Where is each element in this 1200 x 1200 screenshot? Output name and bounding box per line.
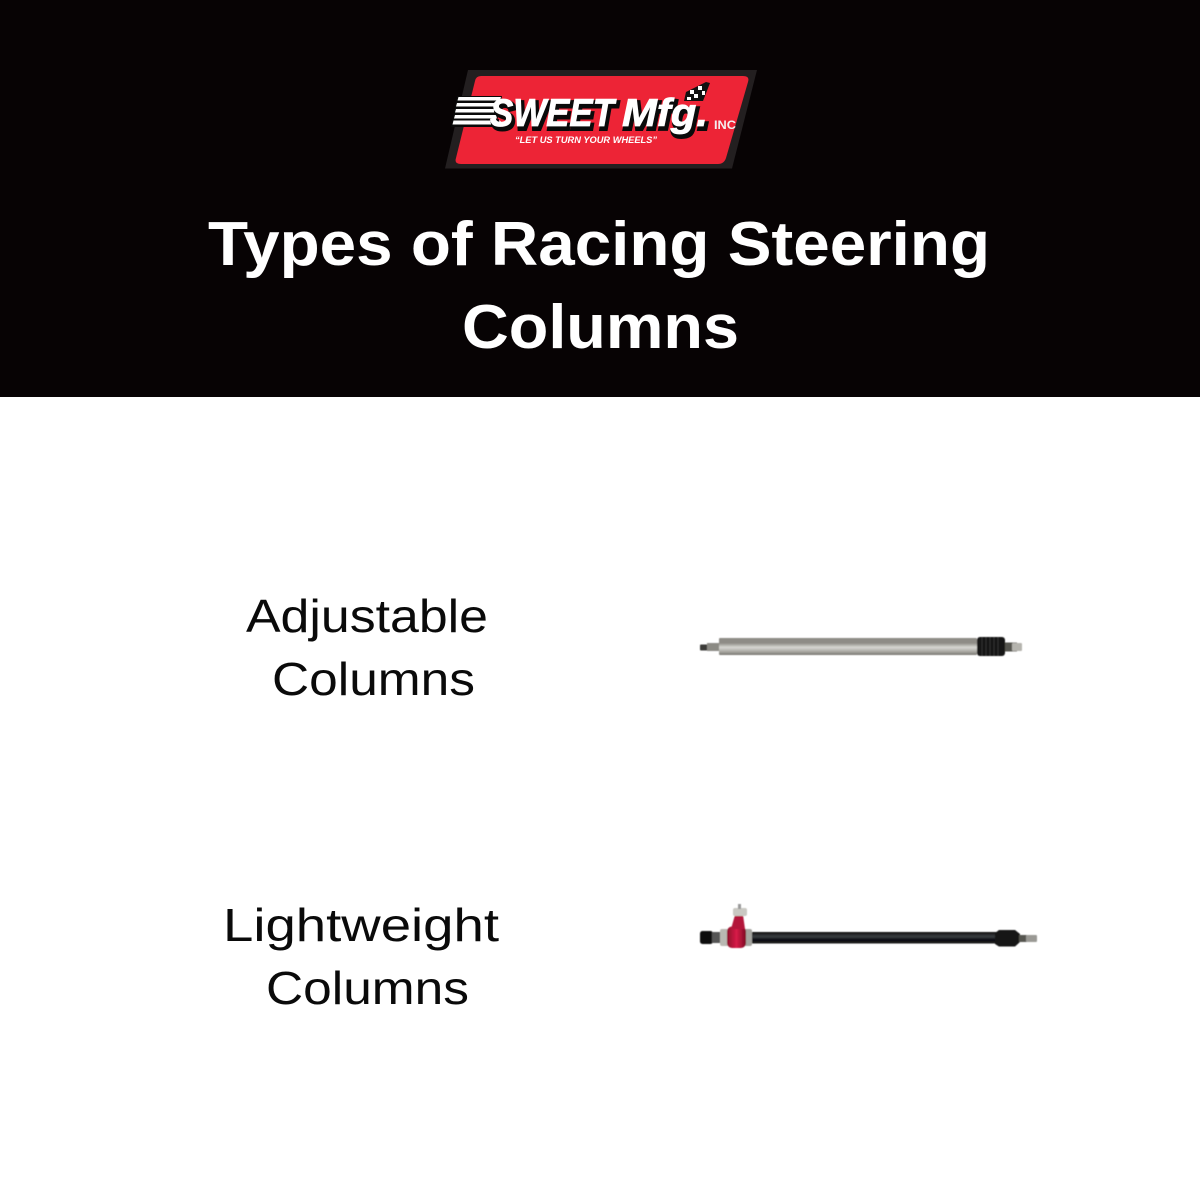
- title: [208, 210, 990, 362]
- label: Lightweight Columns: Columns: [266, 962, 469, 1014]
- clamp bolt: [733, 908, 747, 916]
- title: Columns: [462, 293, 739, 362]
- logo: Sweet Mfg: [445, 70, 757, 168]
- label: Adjustable Columns: [246, 590, 488, 705]
- title: Types of Racing Steering: [208, 210, 990, 279]
- label: Lightweight Columns: [223, 899, 499, 1014]
- logo wordmark: Mfg.: [622, 92, 708, 135]
- label: Lightweight Columns: Lightweight: [223, 899, 499, 951]
- image: lightweight steering column: [700, 904, 1037, 948]
- image: adjustable steering column: [700, 637, 1022, 656]
- rubber boot: [977, 637, 1005, 656]
- logo INC mark: INC: [714, 120, 736, 132]
- logo tagline: “LET US TURN YOUR WHEELS”: [515, 135, 658, 145]
- header band: [0, 0, 1200, 397]
- logo wordmark: Mfg.: [624, 95, 710, 138]
- label: Adjustable Columns: Columns: [272, 653, 475, 705]
- logo checkered flag: [684, 82, 710, 101]
- end boot: [995, 930, 1020, 946]
- logo wordmark: [490, 92, 710, 138]
- logo wordmark: SWEET: [492, 95, 619, 138]
- label: Adjustable Columns: Adjustable: [246, 590, 488, 642]
- logo speed stripes: [451, 96, 503, 127]
- red clamp: [727, 926, 746, 948]
- logo wordmark: SWEET: [490, 92, 617, 135]
